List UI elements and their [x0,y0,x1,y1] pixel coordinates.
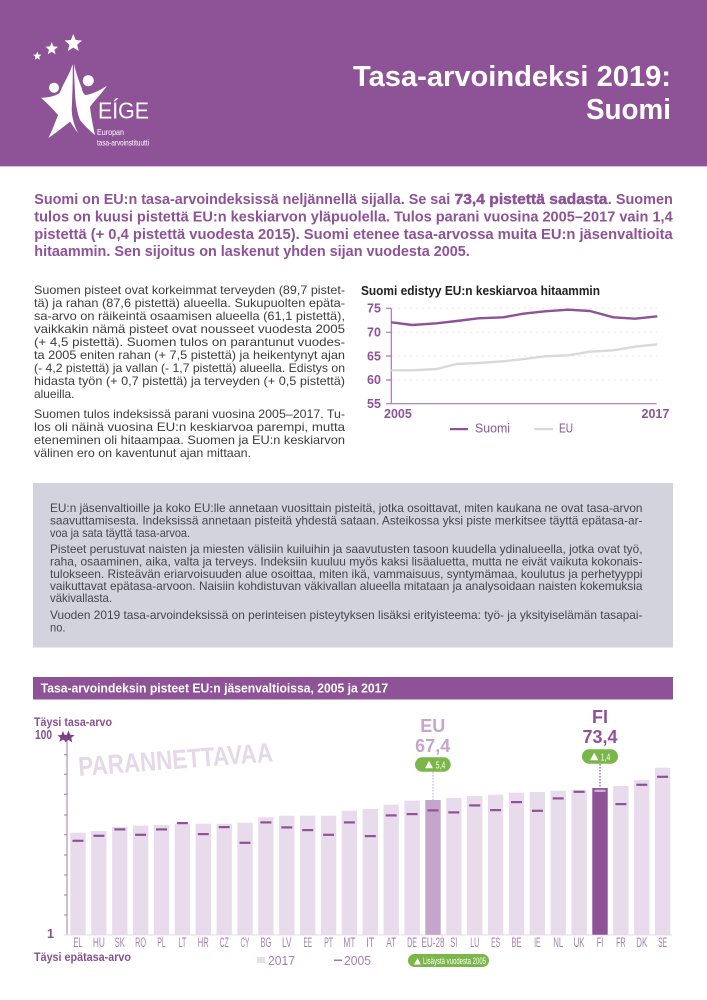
left column text: eteneminen oli hitaampaa. Suomen ja EU:n keskiarvon [34,433,345,447]
country labels: DE [407,935,417,950]
country labels: NL [553,935,563,950]
intro text [34,192,674,260]
grey info box: saavuttamisesta. Indeksissä annetaan pisteitä yhdestä sataan. Asteikossa yksi piste merkitsee täyttä epätasa-ar- [50,514,643,528]
logo: EIGE: Europan [97,127,124,137]
country labels: AT [386,935,396,950]
legend: Lisäystä vuodesta 2005 [423,956,486,967]
callout: EU: 67,4 [415,736,450,756]
grey info box: Vuoden 2019 tasa-arvoindeksissä on perinteisen pisteytyksen lisäksi erityisteema: työ- ja yksityiselämän tasapai- [50,609,643,622]
callout: FI [582,707,618,788]
chart legend: Suomi [475,422,510,436]
left column text: hidasta työn (+ 0,7 pistettä) ja terveyden (+ 0,5 pistettä) [34,374,345,388]
logo: EIGE: tasa-arvoinstituutti [97,138,149,148]
country labels: HU [93,935,105,950]
header banner [0,0,707,167]
intro text: 73,4 pistettä sadasta [454,192,609,208]
y axis: 100 [35,728,52,742]
intro text: pistettä (+ 0,4 pistettä vuodesta 2015). Suomi etenee tasa-arvossa muita EU:n jäsenvaltioita [34,227,674,243]
callout: EU: 5,4 [436,760,446,771]
y axis: Täysi tasa-arvo [34,715,112,729]
country labels: EE [303,935,312,950]
legend [257,953,489,968]
country labels: FR [616,935,626,950]
line chart: Suomi vs EU: 75 [367,302,381,316]
country labels: IT [366,935,374,950]
country labels: HR [198,935,209,950]
section title bar [33,677,673,700]
title: Tasa-arvoindeksi 2019: [353,61,671,93]
grey info box: tulokseen. Risteävän eriarvoisuuden alue osoittaa, miten ikä, vammaisuus, syntymämaa, koulutus ja perhetyyppi [50,568,642,581]
grey info box [33,483,673,648]
left column text: Suomen tulos indeksissä parani vuosina 2005–2017. Tu- [34,407,345,421]
left column text: (- 4,2 pistettä) ja vallan (- 1,7 pistettä) alueella. Edistys on [34,361,345,375]
left column text: alueilla. [34,387,74,401]
line chart: Suomi vs EU: 60 [367,373,381,387]
country labels: BG [260,935,271,950]
line chart: Suomi vs EU: 65 [367,350,381,364]
callout: FI: 1,4 [601,752,611,763]
country labels: ES [491,935,500,950]
chart legend [450,422,573,436]
chart legend: EU [559,422,573,436]
legend: 2005 [344,953,371,968]
y axis: Täysi epätasa-arvo [34,950,131,964]
left column text: sa-arvo on räikeintä osaamisen alueella (61,1 pistettä), [34,309,345,323]
country labels: LU [470,935,479,950]
intro text: Suomi on EU:n tasa-arvoindeksissä neljännellä sijalla. Se sai [34,192,450,208]
country labels: MT [343,935,355,950]
line chart: Suomi vs EU: 2005 [384,407,412,421]
left column text: Suomen pisteet ovat korkeimmat terveyden (89,7 pistet- [34,283,345,297]
callout: EU: EU [420,716,445,736]
logo: EIGE: EÍGE [98,98,149,124]
Suomi line [391,310,657,325]
grey info box: voa ja sata täyttä tasa-arvoa. [50,527,190,540]
left column text: (+ 4,5 pistettä). Suomen tulos on parantunut vuodes- [34,335,345,349]
markers 2005 [72,776,668,844]
callout: FI: FI [592,707,608,727]
country labels: UK [574,935,585,950]
country labels: EL [74,935,83,950]
left column text: välinen ero on kaventunut ajan mittaan. [34,446,251,460]
intro text: . Suomen [608,192,673,208]
line chart: Suomi vs EU [361,284,669,436]
intro text: tulos on kuusi pistettä EU:n keskiarvon yläpuolella. Tulos parani vuosina 2005–2017 vain 1,4 [34,210,673,226]
country labels: CZ [220,935,229,950]
title [353,61,671,126]
country labels: CY [240,935,250,950]
grey info box: väkivallasta. [50,592,112,605]
grey info box: EU:n jäsenvaltioille ja koko EU:lle annetaan vuosittain pisteitä, jotka osoittavat, miten kaukana ne ovat tasa-arvon [50,502,642,515]
bar chart: index scores by member state: SE [658,935,667,950]
grey info box: vaikuttavat epätasa-arvoon. Naisiin kohdistuvan väkivallan alueella mitataan ja analysoidaan naisten kokemuksia [50,580,643,593]
left column text [34,283,345,460]
left column text: tä) ja rahan (87,6 pistettä) alueella. Sukupuolten epäta- [34,296,345,310]
left column text: ta 2005 eniten rahan (+ 7,5 pistettä) ja heikentynyt ajan [34,348,345,362]
country labels [74,935,667,950]
callout: FI: 73,4 [582,727,618,747]
y axis: 1 [47,927,54,941]
grey info box: raha, osaaminen, aika, valta ja terveys. Indeksiin kuuluu myös kaksi lisäaluetta, mutta ne eivät vaikuta kokonais- [50,556,643,568]
y axis [34,715,672,964]
country labels: PT [324,935,333,950]
country labels: LT [178,935,186,950]
country labels: IE [534,935,541,950]
country labels: PL [157,935,166,950]
left column text: vaikkakin nämä pisteet ovat nousseet vuodesta 2005 [34,322,345,336]
grey info box: no. [50,622,66,634]
line chart: Suomi vs EU: 2017 [642,407,669,421]
country labels: RO [135,935,146,950]
country labels: SK [115,935,125,950]
grey info box: Pisteet perustuvat naisten ja miesten välisiin kuiluihin ja saavutusten tasoon kuudella ydinalueella, jotka ovat työ, [50,543,642,556]
logo: EIGE [33,34,149,148]
country labels: SI [450,935,457,950]
section title bar: Tasa-arvoindeksin pisteet EU:n jäsenvaltioissa, 2005 ja 2017 [41,680,388,696]
line chart: Suomi vs EU: 70 [367,326,381,340]
bars 2017 [70,768,670,935]
watermark: parannettavaa: PARANNETTAVAA [77,737,274,782]
country labels: BE [512,935,522,950]
chart heading: Suomi edistyy EU:n keskiarvoa hitaammin [361,284,600,298]
country labels: FI [597,935,603,950]
callout: EU [415,716,451,800]
EU line [391,344,657,370]
line chart: Suomi vs EU: 55 [367,397,381,411]
left column text: los oli näinä vuosina EU:n keskiarvoa parempi, mutta [34,420,345,434]
legend: 2017 [268,953,295,968]
country labels: DK [636,935,647,950]
country labels: EU-28 [422,935,444,950]
title: Suomi [586,94,671,126]
bar chart: index scores by member state [34,707,672,968]
country labels: LV [282,935,292,950]
intro text: hitaammin. Sen sijoitus on laskenut yhden sijan vuodesta 2005. [34,244,470,260]
